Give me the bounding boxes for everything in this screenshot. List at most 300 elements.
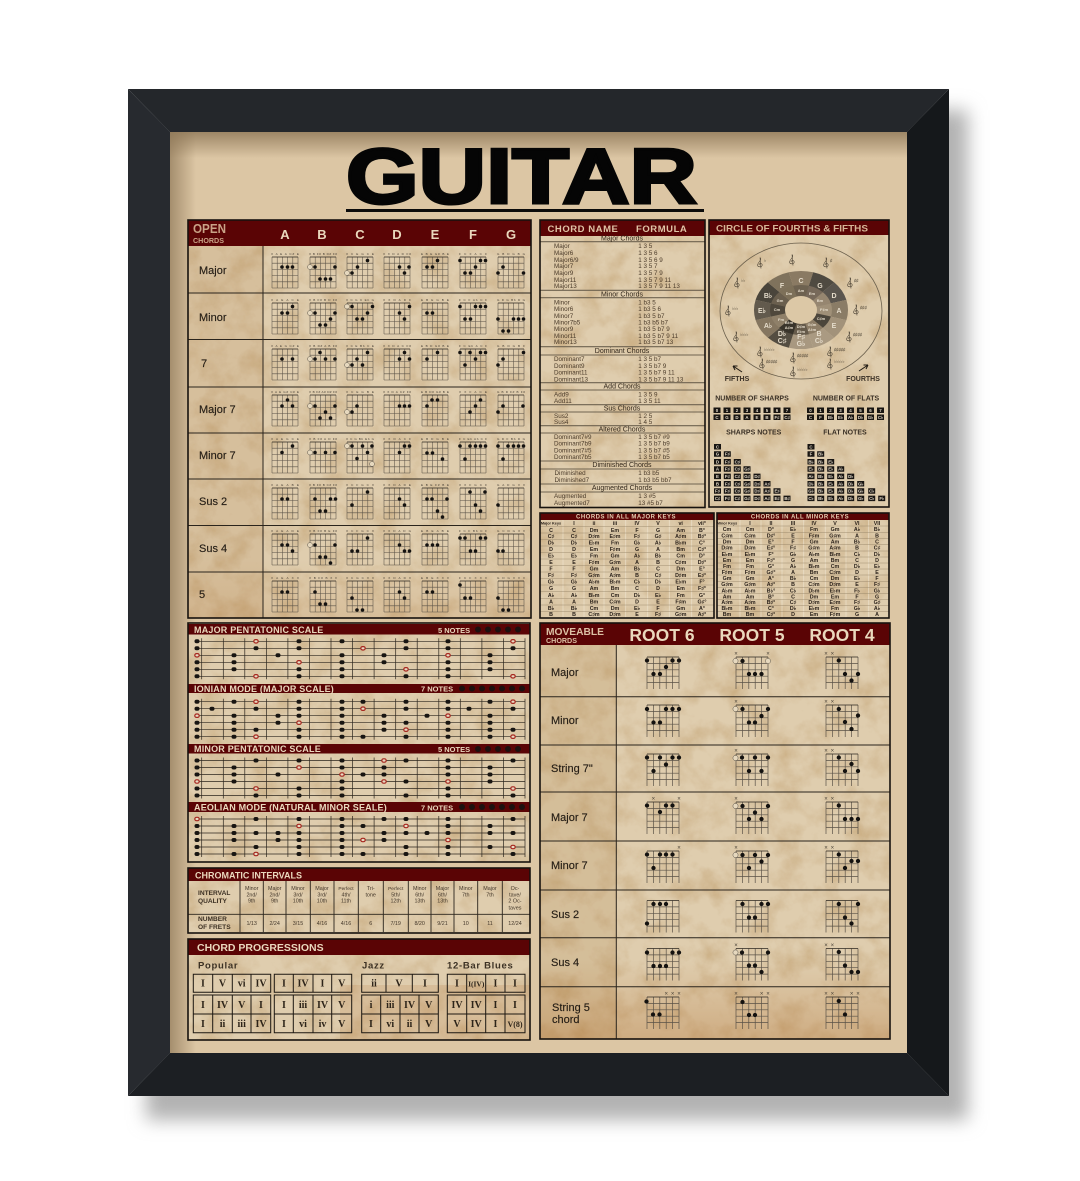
- table rows: minor keys: G♯m: [808, 546, 820, 552]
- chord row: 7: G B D G B F: [497, 344, 525, 348]
- interval quality cells: 7th: [462, 892, 470, 898]
- chord row: Minor: X A E A C E: [271, 298, 299, 302]
- table rows: major keys: vi: [678, 521, 683, 527]
- chord row: Major 7: G B D F# B F#: [497, 390, 525, 394]
- table rows: minor keys: E♭m: [722, 552, 733, 558]
- chord row: 7: E B D G# B E: [421, 344, 449, 348]
- table rows: minor keys: Dm: [723, 540, 732, 546]
- table rows: major keys: A♯m: [675, 534, 687, 540]
- sharps notes staircase: D♯: [754, 481, 760, 486]
- interval quality cells: 9th: [248, 899, 255, 905]
- table rows: major keys: E♭: [634, 606, 641, 612]
- flat notes staircase: A♭: [838, 481, 843, 486]
- moveable row: Minor: ×: [824, 700, 828, 706]
- number of flats key boxes: 7: [879, 408, 882, 413]
- circle of fifths wheel: Dm: [786, 291, 793, 296]
- sharps notes staircase: F♯: [725, 459, 731, 464]
- table rows: major keys: Dm: [611, 606, 620, 612]
- table rows: major keys: Em: [611, 528, 619, 534]
- sharps notes staircase: D♯: [754, 474, 760, 479]
- sharps notes staircase: F♯: [725, 467, 731, 472]
- chord row: Minor 7: [271, 437, 526, 473]
- chord row: 5: X C G C X X: [346, 576, 374, 580]
- number of flats key boxes: B♭: [828, 415, 833, 420]
- table rows: major keys: F♯m: [589, 560, 600, 566]
- number of flats key boxes: G♭: [868, 415, 873, 420]
- table rows: major keys: E: [656, 600, 660, 606]
- chord row: Sus 2: X X F G C F: [459, 483, 487, 487]
- table rows: major keys: D: [549, 547, 553, 553]
- table rows: minor keys: G♯m: [829, 534, 841, 540]
- chord row: Minor: E B E G B E: [421, 298, 449, 302]
- table rows: minor keys: C♯: [874, 546, 881, 552]
- flat notes staircase: E♭: [828, 496, 833, 501]
- flat notes staircase: E♭: [808, 467, 814, 472]
- table rows: minor keys: Cm: [746, 527, 755, 533]
- table rows: major keys: IV: [634, 521, 640, 527]
- table rows: major keys: B: [656, 560, 660, 566]
- scale: aeolian mode: 7 NOTES: [421, 804, 453, 812]
- table rows: minor keys: C♯: [790, 600, 797, 606]
- number of sharps key boxes: C♯: [784, 415, 790, 420]
- chord names: Diminished7: [554, 477, 590, 484]
- progression boxes: popular 2: IV: [297, 978, 309, 990]
- table rows: major keys: B♭: [548, 606, 555, 612]
- sharps notes staircase: C♯: [735, 474, 741, 479]
- number of sharps key boxes: F♯: [775, 415, 780, 420]
- chord formulas: 1 3 5 6 9: [638, 257, 663, 264]
- table rows: minor keys: Bm: [723, 612, 732, 618]
- heading: chords in all major keys: CHORDS IN ALL MAJOR KEYS: [576, 514, 676, 520]
- table rows: minor keys: Bm: [831, 558, 840, 564]
- sharps notes staircase: E: [716, 474, 719, 479]
- row labels: chord types: Major: [199, 265, 227, 277]
- heading: chord name / formula: CHORD NAME: [548, 224, 618, 235]
- progression boxes: popular 2: iv: [319, 1019, 326, 1030]
- key signature icons: ♭♭♭♭: [740, 332, 748, 337]
- progression boxes: popular 1: IV: [217, 1000, 229, 1011]
- column headers: chord roots: A: [280, 227, 290, 242]
- chord formulas: 1 b3 5: [638, 300, 656, 306]
- progression boxes: popular 2: V: [338, 1019, 346, 1030]
- panel: open chords: [188, 220, 531, 618]
- chord formulas: 1 3 5 b7 #9: [638, 434, 670, 441]
- flat notes staircase: D♭: [848, 481, 853, 486]
- moveable row: Major: [647, 652, 858, 689]
- moveable row: Sus 2: [647, 900, 858, 932]
- table rows: major keys: F: [572, 566, 576, 572]
- circle of fifths wheel: C♯: [778, 338, 787, 345]
- table rows: minor keys: III: [791, 521, 796, 527]
- flat notes staircase: B♭: [808, 459, 814, 464]
- table rows: minor keys: Gm: [810, 540, 819, 546]
- table rows: major keys: E♯°: [698, 573, 706, 579]
- number of frets cells: 4/16: [341, 921, 351, 927]
- chord names: Augmented7: [554, 500, 590, 507]
- number of sharps key boxes: 4: [756, 408, 759, 413]
- row labels: INTERVAL: [198, 890, 230, 897]
- chord row: Major 7: [271, 390, 525, 426]
- table rows: minor keys: D♯m: [808, 600, 820, 606]
- row labels: moveable types: String 7": [551, 763, 593, 775]
- flat notes staircase: C♭: [869, 489, 874, 494]
- number of sharps key boxes: 0: [716, 408, 719, 413]
- chord row: Sus 2: X A E A B E: [271, 483, 299, 487]
- chord names: Add9: [554, 392, 569, 398]
- progression boxes: popular 2: iii: [299, 1000, 307, 1011]
- table rows: major keys: D♭: [548, 540, 555, 546]
- table rows: minor keys: Em: [746, 558, 754, 564]
- table rows: major keys: ii: [593, 521, 596, 527]
- table rows: major keys: A♭m: [588, 580, 600, 586]
- table rows: major keys: E: [635, 612, 639, 618]
- table rows: major keys: F♯: [548, 573, 554, 579]
- table rows: minor keys: [717, 521, 881, 618]
- moveable row: Major: ×: [831, 652, 835, 658]
- flat notes staircase: G♭: [858, 496, 863, 501]
- number of flats key boxes: F: [819, 415, 822, 420]
- interval quality cells: Perfect: [338, 886, 354, 892]
- number of frets cells: 4/16: [317, 921, 327, 927]
- table rows: minor keys: E♭m: [809, 606, 820, 612]
- chord row: 7: X A E G C# E: [271, 344, 299, 348]
- table rows: minor keys: F: [855, 594, 859, 600]
- table rows: minor keys: Em: [810, 612, 818, 618]
- table rows: minor keys: Fm: [810, 527, 818, 533]
- flat notes staircase: B♭: [818, 459, 823, 464]
- chord names: Minor13: [554, 339, 577, 346]
- chord names: Major11: [554, 277, 577, 284]
- table rows: major keys: B♭: [571, 606, 578, 612]
- number of frets cells: 11: [487, 921, 493, 927]
- moveable row: Minor: [647, 700, 858, 737]
- moveable row: Minor 7: ×: [677, 846, 681, 852]
- table rows: major keys: F♯: [634, 534, 640, 540]
- chord row: Sus 2: G A D G X X: [497, 483, 525, 487]
- column headers: chord roots: D: [392, 227, 402, 242]
- table rows: minor keys: C°: [768, 606, 774, 612]
- chord row: Minor: [271, 298, 526, 334]
- table rows: major keys: E: [549, 560, 553, 566]
- table rows: minor keys: C♯m: [808, 582, 820, 588]
- sharps notes staircase: C♯: [735, 496, 741, 501]
- table rows: minor keys: Bm: [810, 570, 819, 576]
- chord formulas: 1 3 5: [638, 243, 653, 250]
- table rows: minor keys: B: [855, 546, 859, 552]
- sharps notes staircase: E♯: [774, 489, 780, 494]
- table rows: minor keys: A♭m: [808, 552, 820, 558]
- table rows: major keys: E♯m: [610, 534, 621, 540]
- progression boxes: jazz: [362, 974, 438, 1033]
- chord row: Minor: X B F# B D F#: [309, 298, 337, 302]
- chord row: Sus 2: X C F G C X: [346, 483, 374, 487]
- table rows: minor keys: G: [791, 558, 795, 564]
- moveable row: Minor 7: ×: [734, 846, 738, 852]
- chord names: Dominant11: [554, 370, 588, 376]
- chord row: Sus 2: [271, 483, 525, 519]
- table rows: major keys: G: [656, 528, 660, 534]
- table rows: minor keys: Am: [831, 540, 840, 546]
- circle of fifths wheel: D: [831, 293, 837, 300]
- table rows: minor keys: B♭m: [721, 606, 733, 612]
- table rows: minor keys: V: [833, 521, 837, 527]
- chord formulas: 1 3 5 b7 9 11 13: [638, 376, 684, 384]
- table rows: minor keys: D: [791, 612, 795, 618]
- progression boxes: 12-bar blues: V(8): [507, 1020, 523, 1029]
- table rows: major keys: D°: [699, 554, 705, 560]
- row labels: moveable types: Major 7: [551, 812, 588, 824]
- progression boxes: popular 1: iii: [238, 1019, 246, 1030]
- table rows: major keys: A: [572, 600, 576, 606]
- chord names: Diminished: [554, 470, 586, 477]
- table rows: major keys: E°: [699, 566, 705, 572]
- caption labels: FLAT NOTES: [823, 430, 867, 436]
- table rows: major keys: B: [549, 612, 553, 618]
- caption labels: NUMBER OF SHARPS: [715, 396, 789, 402]
- circle of fifths wheel: B♭: [764, 292, 772, 300]
- chord formulas: 1 3 5 7: [638, 263, 658, 270]
- flat notes staircase: E♭: [828, 459, 833, 464]
- table rows: minor keys: Fm: [723, 564, 731, 570]
- sharps notes staircase: D♯: [754, 489, 760, 494]
- table rows: major keys: C♯: [571, 534, 578, 540]
- number of flats key boxes: C♭: [878, 415, 883, 420]
- chord row: Major: F C F A C F: [459, 252, 487, 256]
- table rows: minor keys: A♭m: [744, 588, 756, 594]
- row labels: QUALITY: [198, 898, 228, 905]
- moveable row: String 5 chord: ×: [760, 992, 764, 998]
- chord names: [554, 243, 592, 507]
- interval quality cells: 10th: [317, 899, 327, 905]
- arrow: fourths: [859, 365, 868, 371]
- sharps notes staircase: D♯: [754, 496, 760, 501]
- heading: chromatic intervals: CHROMATIC INTERVALS: [195, 870, 302, 880]
- table rows: major keys: D♭: [655, 580, 662, 586]
- number of sharps key boxes: 3: [746, 408, 749, 413]
- panel: chord name and formula: [540, 220, 705, 508]
- chord row: Major 7: E B D# G# B E: [421, 390, 449, 394]
- table rows: major keys: F♯: [655, 612, 661, 618]
- chord row: Major 7: X A E G# C# E: [271, 390, 299, 394]
- table rows: minor keys: G♯: [874, 600, 881, 606]
- number of flats key boxes: 2: [829, 408, 832, 413]
- number of sharps key boxes: B: [765, 415, 769, 420]
- table rows: major keys: A: [635, 560, 639, 566]
- table rows: minor keys: C♯m: [829, 570, 841, 576]
- interval quality cells: Major: [315, 886, 329, 892]
- table rows: major keys: A°: [699, 606, 705, 612]
- column headers: chord roots: C: [355, 227, 365, 242]
- table rows: major keys: [541, 521, 706, 618]
- progression boxes: popular 2: I: [282, 1019, 286, 1030]
- table rows: minor keys: B: [875, 534, 879, 540]
- table rows: minor keys: E♭m: [830, 588, 841, 594]
- table rows: major keys: E♭m: [675, 580, 686, 586]
- chord row: Major 7: X B F# A# D# F#: [309, 390, 337, 394]
- chord row: Minor: X X D A D F: [383, 298, 411, 302]
- table rows: minor keys: F♯m: [722, 570, 733, 576]
- progression boxes: 12-bar blues: IV: [471, 1000, 483, 1011]
- sharps notes staircase: C♯: [715, 496, 721, 501]
- key signature icons: ♭♭♭♭♭: [764, 347, 775, 352]
- chord row: Sus 4: X C F G C X: [346, 529, 374, 533]
- number of sharps key boxes: C: [715, 415, 719, 420]
- flat notes staircase: B♭: [818, 481, 823, 486]
- table rows: major keys: E♭: [571, 554, 578, 560]
- chord names: Minor11: [554, 333, 577, 340]
- table rows: minor keys: E♯°: [767, 546, 775, 552]
- chord row: Major: G B D G B G: [497, 252, 526, 256]
- table rows: major keys: A♭: [634, 554, 641, 560]
- circle of fifths wheel: B: [816, 331, 822, 338]
- key signature icons: ♯♯♯♯♯: [766, 359, 778, 364]
- number of flats key boxes: 1: [819, 408, 822, 413]
- table rows: minor keys: Dm: [831, 576, 840, 582]
- column headers: chord roots: G: [506, 227, 516, 242]
- table rows: minor keys: G♭: [874, 588, 881, 594]
- circle of fifths wheel: Bm: [817, 298, 824, 303]
- progression boxes: popular 1: V: [238, 1000, 246, 1011]
- table rows: minor keys: F♯m: [745, 570, 756, 576]
- table rows: minor keys: C♭: [790, 588, 797, 594]
- number of flats key boxes: A♭: [848, 415, 853, 420]
- moveable row: Major: ×: [734, 652, 738, 658]
- chord row: 5: E B E X X X: [421, 576, 449, 580]
- flat notes staircase: G♭: [808, 489, 814, 494]
- table rows: major keys: Am: [590, 586, 599, 592]
- caption labels: SHARPS NOTES: [726, 430, 782, 436]
- progression boxes: 12-bar blues: I: [455, 978, 459, 990]
- interval quality cells: taves: [509, 906, 522, 912]
- table rows: minor keys: B: [791, 582, 795, 588]
- table rows: major keys: C: [549, 528, 553, 534]
- chord names: Dominant9: [554, 363, 585, 370]
- scale: major pentatonic: 5 NOTES: [438, 626, 470, 635]
- table rows: major keys: C: [635, 586, 639, 592]
- scale: major pentatonic: [188, 624, 530, 679]
- interval quality cells: 4th/: [342, 892, 351, 898]
- progression boxes: popular 2: vi: [299, 1019, 307, 1030]
- progression boxes: jazz: ii: [407, 1019, 412, 1030]
- table rows: minor keys: G♯m: [721, 582, 733, 588]
- moveable row: String 5 chord: ×: [766, 992, 770, 998]
- scale: minor pentatonic: [188, 744, 530, 798]
- chord row: Major: E B E G# B E: [421, 252, 449, 256]
- table rows: major keys: F: [656, 606, 660, 612]
- table rows: major keys: B♭m: [675, 540, 687, 546]
- row labels: NUMBER: [198, 916, 227, 923]
- section headings: [592, 236, 653, 492]
- column labels: Popular: [198, 960, 238, 972]
- chord formulas: 1 b3 b5 bb7: [638, 477, 672, 484]
- interval quality cells: 9th: [271, 899, 278, 905]
- number of sharps key boxes: G: [725, 415, 729, 420]
- moveable row: Sus 4: ×: [824, 943, 828, 949]
- chord row: Major 7: X C E G B E: [346, 390, 374, 394]
- table rows: minor keys: B♭: [790, 576, 797, 582]
- flat notes staircase: F♭: [879, 496, 884, 501]
- circle of fifths wheel: Cm: [774, 307, 781, 312]
- row labels: moveable types: Major: [551, 667, 579, 679]
- table rows: minor keys: A°: [768, 576, 774, 582]
- table rows: minor keys: G♭: [790, 552, 797, 558]
- chord row: 7: X X D A C F#: [383, 344, 411, 348]
- table rows: minor keys: F: [791, 540, 795, 546]
- picture frame: [128, 89, 949, 1096]
- chord names: Dominant7b5: [554, 454, 592, 461]
- chord formulas: 1 2 5: [638, 413, 653, 420]
- column headers: roots: ROOT 6: [629, 625, 695, 645]
- number of sharps key boxes: D: [735, 415, 739, 420]
- table rows: major keys: Dm: [676, 566, 685, 572]
- scale: minor pentatonic: MINOR PENTATONIC SCALE: [194, 744, 321, 754]
- table rows: minor keys: VII: [874, 521, 881, 527]
- moveable row: Major 7: ×: [677, 796, 681, 802]
- scale: major pentatonic: MAJOR PENTATONIC SCALE: [194, 625, 323, 635]
- table rows: major keys: F♯: [571, 573, 577, 579]
- flat notes staircase: A♭: [838, 474, 843, 479]
- sharps notes staircase: D: [716, 459, 719, 464]
- moveable row: String 5 chord: ×: [677, 992, 681, 998]
- number of frets cells: 12/24: [508, 921, 522, 927]
- key signature icons: ♭♭: [741, 278, 745, 283]
- moveable row: String 5 chord: ×: [850, 992, 854, 998]
- chord names: Major13: [554, 283, 577, 290]
- chord names: Dominant7#5: [554, 448, 592, 454]
- table rows: minor keys: Dm: [810, 594, 819, 600]
- chord row: 5: [271, 576, 525, 612]
- moveable row: Major 7: ×: [734, 796, 738, 802]
- sharps notes staircase: A: [716, 467, 720, 472]
- progression boxes: popular 1: V: [219, 978, 227, 990]
- chord row: Major: X X D A D F#: [383, 252, 411, 256]
- table rows: minor keys: E: [791, 534, 795, 540]
- number of frets cells: 7/19: [390, 921, 401, 927]
- table rows: minor keys: D♯m: [721, 546, 733, 552]
- heading: chord name / formula: [548, 224, 687, 235]
- table rows: minor keys: F♭: [854, 588, 860, 594]
- progression boxes: jazz: i: [370, 1000, 373, 1011]
- chord names: Minor6: [554, 306, 574, 313]
- chord formulas: 1 3 5 b7 9 11: [638, 370, 675, 376]
- table rows: major keys: B♭m: [588, 593, 600, 599]
- progression boxes: popular 1: ii: [220, 1019, 225, 1030]
- table rows: major keys: V: [656, 521, 660, 527]
- moveable row: String 7: ×: [824, 748, 828, 754]
- table rows: major keys: D♯m: [588, 534, 600, 540]
- table rows: major keys: F♯m: [675, 600, 686, 606]
- moveable row: Major: ×: [824, 652, 828, 658]
- chord row: Minor 7: X X D A C F: [383, 437, 411, 441]
- circle of fifths wheel: Fm: [778, 317, 784, 322]
- table rows: minor keys: D°: [768, 527, 774, 533]
- row labels: chord types: Sus 2: [199, 496, 227, 508]
- moveable row: Major 7: ×: [824, 796, 828, 802]
- chord names: Dominant7#9: [554, 434, 592, 441]
- moveable row: Minor 7: ×: [831, 846, 835, 852]
- interval quality cells: Minor: [459, 886, 473, 892]
- moveable row: Minor: ×: [831, 700, 835, 706]
- sharps notes staircase: F♯: [715, 489, 721, 494]
- column labels: Jazz: [362, 960, 385, 972]
- section headings: Augmented Chords: [592, 485, 653, 492]
- table rows: major keys: F°: [699, 580, 705, 586]
- interval quality cells: 5th/: [391, 892, 401, 898]
- row labels: chord types: Major 7: [199, 404, 236, 416]
- chord row: Major 7: X X D A C# F#: [383, 390, 411, 394]
- sharps notes staircase: C♯: [735, 481, 741, 486]
- number of flats key boxes: 5: [859, 408, 862, 413]
